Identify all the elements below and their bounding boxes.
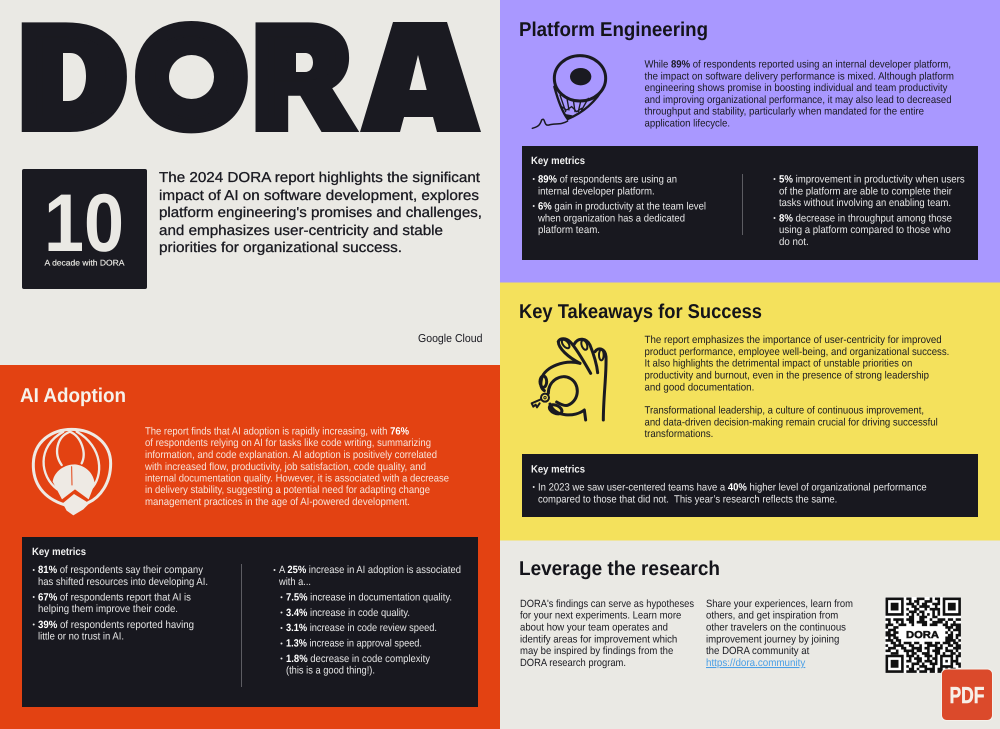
text column: hypotheses: may be inspired by findings from the bbox=[520, 645, 673, 657]
metrics list: left: helping them improve their code. bbox=[38, 603, 178, 615]
key metrics panel bbox=[522, 454, 978, 517]
metrics list: left bbox=[533, 174, 706, 236]
body text: and data-driven decision-making remain crucial for driving successful bbox=[644, 416, 938, 428]
heading: AI Adoption: AI Adoption bbox=[20, 385, 126, 407]
metrics list: right: 5% improvement in productivity when users bbox=[779, 174, 965, 186]
QR code bbox=[885, 597, 961, 673]
panel: Leverage the research bbox=[500, 540, 1000, 729]
body text: transformations. bbox=[644, 428, 713, 440]
key metrics panel bbox=[22, 537, 478, 707]
metrics list: left: 67% of respondents report that AI is bbox=[38, 592, 191, 604]
title: DORA: D bbox=[19, 0, 126, 155]
panel: Platform Engineering bbox=[500, 0, 1000, 282]
metrics list: right: 3.4% increase in code quality. bbox=[286, 607, 410, 619]
intro text: priorities for organizational success. bbox=[159, 240, 402, 256]
body text: and improving organizational performance, it may also lead to decreased bbox=[644, 94, 952, 106]
text column: community: others, and get inspiration from bbox=[706, 610, 839, 622]
metrics list: right: using a platform compared to those who bbox=[779, 224, 951, 236]
metrics list: right: 8% decrease in throughput among those bbox=[779, 212, 952, 224]
metrics list: left: little or no trust in AI. bbox=[38, 630, 124, 642]
body text: throughput and stability, particularly when mandated for the entire bbox=[644, 106, 924, 118]
QR code: DORA bbox=[906, 630, 939, 641]
text column: hypotheses: about how your team operates and bbox=[520, 622, 668, 634]
metrics list: right: 1.8% decrease in code complexity bbox=[286, 653, 431, 665]
heading: Leverage the research: Leverage the research bbox=[519, 558, 720, 580]
body text: of respondents relying on AI for tasks like code writing, summarizing bbox=[145, 437, 431, 449]
body text: Transformational leadership, a culture of continuous improvement, bbox=[644, 405, 924, 417]
text column: community: the DORA community at bbox=[706, 645, 809, 657]
body text: The report emphasizes the importance of user-centricity for improved bbox=[644, 334, 942, 346]
body text: information, and code explanation. AI adoption is positively correlated bbox=[145, 449, 437, 461]
heading: key metrics: Key metrics bbox=[32, 546, 86, 558]
metrics list: right: 3.1% increase in code review speed. bbox=[286, 622, 437, 634]
badge: a decade with DORA bbox=[22, 169, 147, 289]
body text: management practices in the age of AI-powered development. bbox=[145, 496, 410, 508]
intro text: The 2024 DORA report highlights the significant bbox=[159, 170, 480, 186]
badge: a decade with DORA: 10 bbox=[44, 178, 124, 269]
title: DORA: O bbox=[136, 0, 247, 155]
title: DORA: A bbox=[370, 0, 471, 155]
panel: Key Takeaways for Success bbox=[500, 282, 1000, 540]
metrics list: right: do not. bbox=[779, 236, 809, 248]
text column: hypotheses: DORA research program. bbox=[520, 657, 626, 669]
metrics list: left: 89% of respondents are using an bbox=[538, 174, 677, 186]
metrics list: right bbox=[774, 174, 965, 248]
metrics list: left: platform team. bbox=[538, 224, 600, 236]
body text: The report finds that AI adoption is rapidly increasing, with 76% bbox=[145, 426, 410, 438]
metrics list: left: 39% of respondents reported having bbox=[38, 619, 194, 631]
panel: AI Adoption bbox=[0, 365, 500, 729]
metrics list: In 2023 we saw user-centered teams have a 40% higher level of organizational performance bbox=[538, 482, 927, 494]
intro text: and emphasizes user-centricity and stable bbox=[159, 223, 443, 239]
body text bbox=[144, 426, 449, 508]
metrics list bbox=[533, 482, 927, 505]
text column: hypotheses: DORA's findings can serve as hypotheses bbox=[520, 598, 694, 610]
body text: product performance, employee well-being, and organizational success. bbox=[644, 346, 949, 358]
body text: in delivery stability, suggesting a potential need for adapting change bbox=[145, 484, 430, 496]
text column: community: Share your experiences, learn from bbox=[706, 598, 853, 610]
metrics list: right: of the platform are able to complete their bbox=[779, 185, 952, 197]
metrics list: right: tasks without involving an enabling team. bbox=[779, 197, 951, 209]
icon: hot air balloon seen from below bbox=[33, 429, 111, 515]
text column: community: improvement journey by joining bbox=[706, 633, 839, 645]
PDF badge bbox=[942, 669, 992, 720]
metrics list: left bbox=[33, 564, 208, 642]
text column: community bbox=[706, 598, 853, 669]
body text: productivity and burnout, even in the presence of strong leadership bbox=[644, 369, 929, 381]
body text bbox=[644, 334, 949, 440]
body text: While 89% of respondents reported using an internal developer platform, bbox=[644, 58, 951, 70]
metrics list: left: 6% gain in productivity at the team level bbox=[538, 201, 706, 213]
body text: the impact on software delivery performance is mixed. Although platform bbox=[644, 70, 954, 82]
icon: hand holding a key bbox=[532, 338, 606, 420]
metrics list: right: 7.5% increase in documentation quality. bbox=[286, 592, 452, 604]
metrics list: right: 1.3% increase in approval speed. bbox=[286, 638, 422, 650]
intro text: impact of AI on software development, explores bbox=[159, 188, 479, 204]
title: DORA: R bbox=[253, 0, 350, 155]
body text bbox=[644, 58, 954, 129]
heading: Key Takeaways for Success: Key Takeaways for Success bbox=[519, 301, 762, 323]
panel: DORA intro bbox=[0, 0, 500, 365]
metrics list: left: internal developer platform. bbox=[538, 185, 655, 197]
body text: application lifecycle. bbox=[644, 117, 730, 129]
metrics list: compared to those that did not. This year’s research reflects the same. bbox=[538, 493, 837, 505]
intro text bbox=[159, 170, 482, 256]
metrics list: left: 81% of respondents say their company bbox=[38, 564, 204, 576]
intro text: platform engineering's promises and challenges, bbox=[159, 205, 482, 221]
metrics list: left: when organization has a dedicated bbox=[537, 212, 685, 224]
PDF badge: PDF bbox=[950, 682, 984, 708]
heading: key metrics: Key metrics bbox=[531, 463, 585, 475]
metrics list: right: with a... bbox=[278, 576, 311, 588]
metrics list: right: (this is a good thing!). bbox=[286, 665, 375, 677]
heading: key metrics: Key metrics bbox=[531, 155, 585, 167]
title: DORA bbox=[19, 0, 481, 155]
metrics list: left: has shifted resources into developing AI. bbox=[38, 576, 208, 588]
body text: with increased flow, productivity, job satisfaction, code quality, and bbox=[144, 461, 426, 473]
text column: hypotheses bbox=[520, 598, 694, 669]
body text: and good documentation. bbox=[644, 381, 754, 393]
heading: Platform Engineering: Platform Engineering bbox=[519, 19, 708, 41]
text column: hypotheses: identify areas for improvement which bbox=[520, 633, 677, 645]
icon: balloon with tail bbox=[532, 56, 606, 128]
body text: engineering shows promise in boosting individual and team productivity bbox=[644, 82, 948, 94]
body text: internal documentation quality. However, it is associated with a decrease bbox=[145, 472, 449, 484]
text column: community: https://dora.community bbox=[706, 657, 806, 669]
metrics list: right bbox=[274, 564, 461, 677]
logo: Google Cloud: Google Cloud bbox=[418, 333, 482, 345]
badge: a decade with DORA: A decade with DORA bbox=[44, 258, 125, 268]
metrics list: right: A 25% increase in AI adoption is associated bbox=[279, 564, 461, 576]
text column: community: other travelers on the continuous bbox=[706, 622, 846, 634]
text column: hypotheses: for your next experiments. Learn more bbox=[520, 610, 681, 622]
key metrics panel bbox=[522, 146, 978, 260]
body text: It also highlights the detrimental impact of unstable priorities on bbox=[644, 358, 912, 370]
